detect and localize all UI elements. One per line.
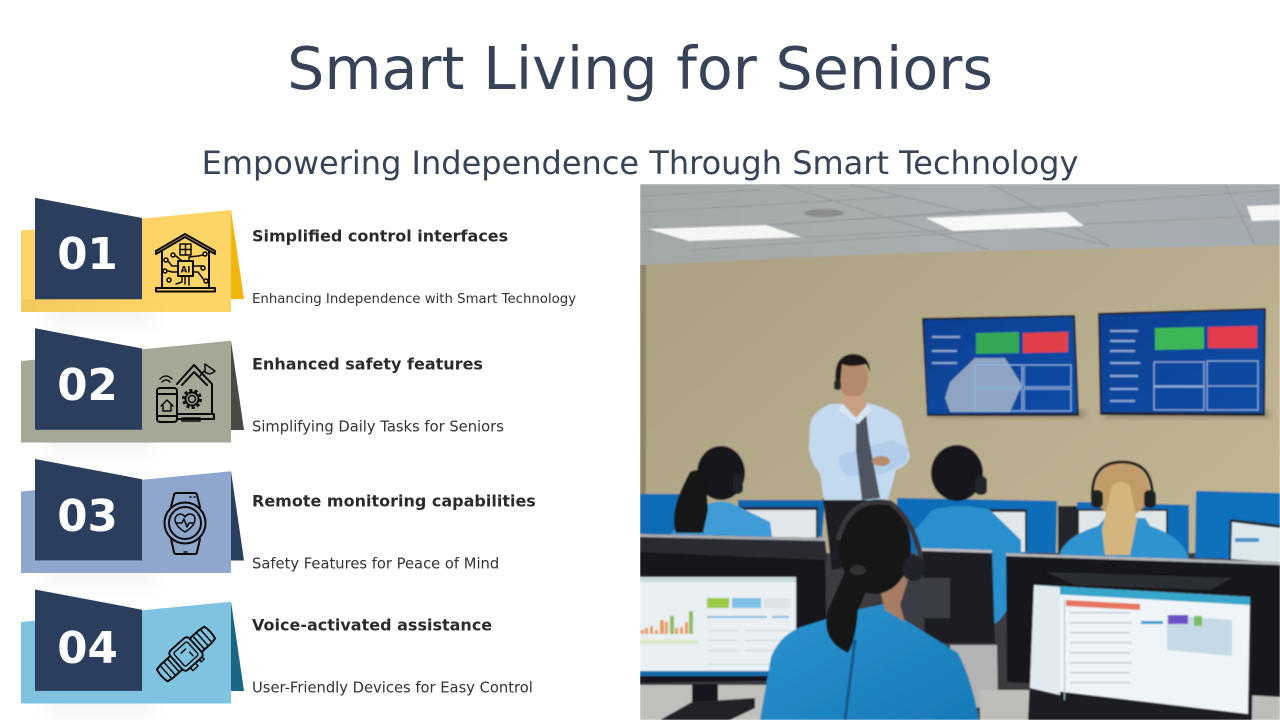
folded accent: [231, 471, 244, 560]
panel: item 01: [21, 198, 244, 320]
card shadow: [45, 692, 155, 712]
coloured card: [21, 210, 231, 312]
folded accent: [231, 341, 244, 430]
heading: Remote monitoring capabilities: [252, 492, 536, 510]
icon: AI smart house: AI: [181, 266, 190, 276]
text: item 01: [252, 226, 576, 307]
icon: rotated smartwatch: [153, 622, 222, 689]
description: Simplifying Daily Tasks for Seniors: [252, 418, 504, 435]
text: item 02: [252, 354, 504, 435]
heading: Voice-activated assistance: [252, 616, 492, 634]
icon: heart rate smartwatch: [164, 493, 206, 554]
panel: item 02: [21, 328, 244, 451]
heading: Simplified control interfaces: [252, 226, 508, 246]
card shadow: [45, 431, 155, 451]
photo: seniors monitoring call centre: [640, 184, 1280, 720]
number block: [35, 590, 142, 691]
coloured card: [21, 341, 231, 442]
description: User-Friendly Devices for Easy Control: [252, 679, 533, 696]
number block: [35, 459, 142, 560]
card wash: [21, 299, 171, 312]
icon: AI smart house: [156, 234, 215, 292]
coloured card: [21, 471, 231, 573]
panel: item 03: [21, 459, 244, 582]
card shadow: [45, 300, 155, 320]
description: Safety Features for Peace of Mind: [252, 555, 499, 572]
number: 03: [57, 492, 118, 542]
number block: [35, 328, 142, 430]
subtitle: Empowering Independence Through Smart Technology: [202, 144, 1078, 182]
title: Smart Living for Seniors: [287, 35, 993, 103]
number block: [35, 198, 142, 299]
card shadow: [45, 562, 155, 582]
number: 02: [57, 361, 118, 411]
text: item 04: [252, 616, 533, 696]
number: 01: [57, 230, 118, 280]
number: 04: [57, 624, 118, 674]
text: item 03: [252, 492, 536, 572]
coloured card: [21, 602, 231, 704]
panel: item 04: [21, 590, 244, 712]
icon: smart home phone: [157, 364, 215, 422]
folded accent: [231, 210, 244, 299]
folded accent: [231, 602, 244, 691]
heading: Enhanced safety features: [252, 354, 483, 374]
description: Enhancing Independence with Smart Technology: [252, 292, 576, 307]
